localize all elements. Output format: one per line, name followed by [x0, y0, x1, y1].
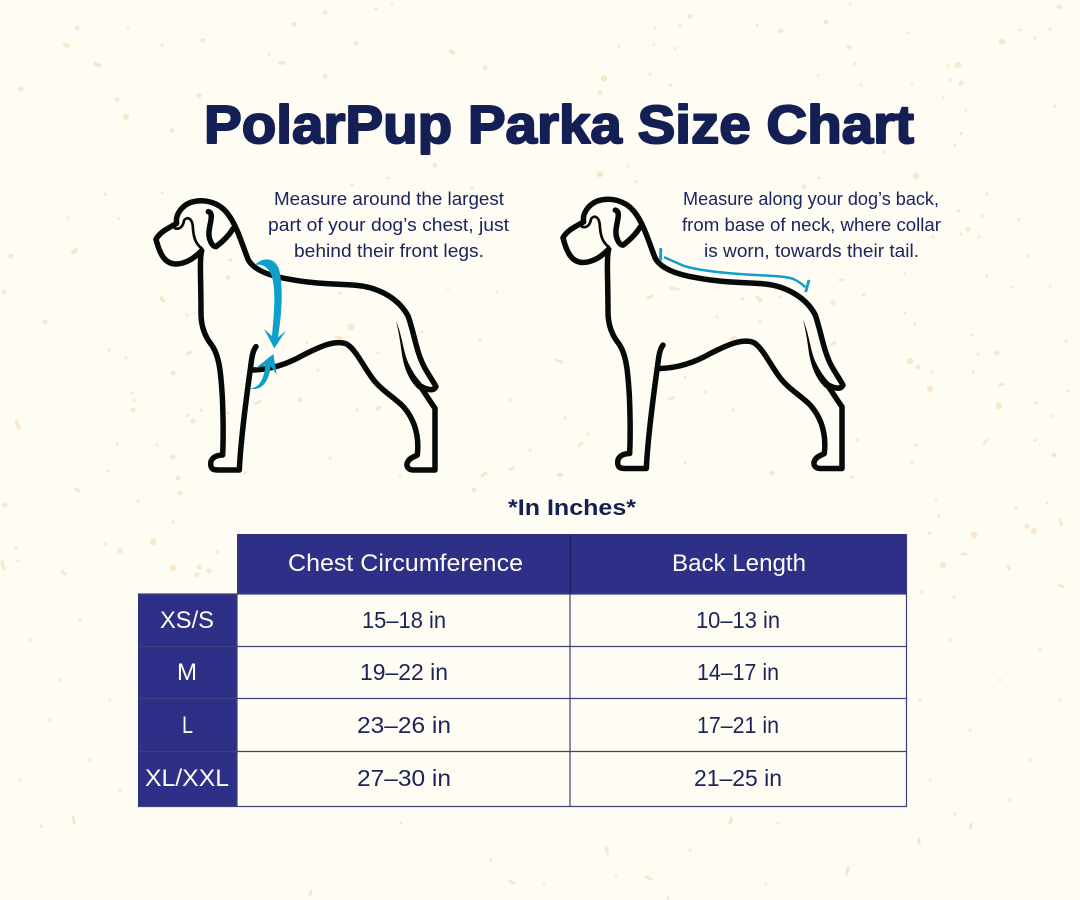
column header: back	[571, 534, 907, 594]
back length values: 14–17 in	[697, 659, 779, 685]
chest values: 15–18 in	[362, 607, 446, 633]
caption: back instructions	[682, 189, 941, 261]
tail inner edge	[396, 321, 423, 389]
chest values: 23–26 in	[357, 712, 451, 738]
size labels: XL/XXL	[145, 765, 229, 792]
illustration: back length dog	[563, 199, 843, 468]
column header: chest: Chest Circumference	[288, 550, 523, 577]
size labels: XS/S	[160, 607, 214, 634]
speckles: top band	[4, 4, 1059, 297]
caption: chest instructions: Measure around the largest	[274, 189, 504, 209]
caption: back instructions: is worn, towards their tail.	[704, 241, 919, 261]
column header: chest	[237, 534, 571, 594]
chest values: 27–30 in	[357, 765, 451, 791]
back length values: 10–13 in	[696, 607, 780, 633]
tail inner edge	[803, 319, 830, 388]
size table	[138, 534, 907, 807]
chest values: 19–22 in	[360, 659, 448, 685]
caption: back instructions: Measure along your dog’s back,	[683, 189, 939, 209]
dog outline	[156, 201, 436, 470]
illustration: chest measurement dog	[156, 201, 436, 470]
caption: chest instructions	[268, 189, 509, 261]
dog outline	[563, 199, 843, 468]
title: PolarPup Parka Size Chart	[204, 95, 914, 155]
chest arrow	[250, 259, 286, 389]
back length values: 21–25 in	[694, 765, 782, 791]
units note: *In Inches*	[508, 495, 636, 520]
size labels: L	[182, 712, 193, 739]
caption: back instructions: from base of neck, where collar	[682, 215, 941, 235]
size labels	[138, 594, 237, 807]
table body background	[237, 594, 907, 807]
column header: back: Back Length	[672, 550, 806, 577]
back length values	[694, 607, 782, 791]
back length values: 17–21 in	[697, 712, 779, 738]
back measurement line	[661, 248, 809, 292]
caption: chest instructions: behind their front legs.	[294, 241, 484, 261]
size labels: M	[177, 659, 197, 686]
caption: chest instructions: part of your dog’s chest, just	[268, 215, 509, 235]
chest values	[357, 607, 451, 791]
